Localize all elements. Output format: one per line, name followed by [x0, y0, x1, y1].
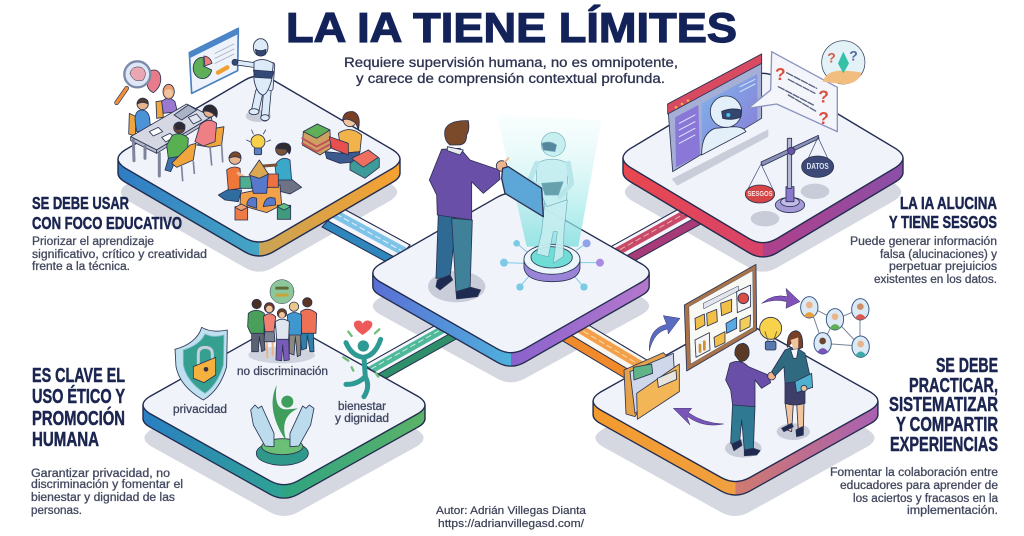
icon: speech bubble with question marks: ? [818, 87, 829, 107]
subtitle [344, 55, 678, 86]
children building blocks [218, 143, 302, 220]
icon: equality badge [270, 280, 294, 304]
man and woman shaking hands [725, 331, 813, 458]
text block: educational focus: SE DEBE USAR [32, 193, 129, 213]
text block: educational focus: significativo, crítico y creatividad [32, 249, 207, 261]
text block: hallucinations and bias: falsa (alucinaciones) y [880, 249, 997, 261]
icon: knowledge board [684, 264, 757, 371]
icon: presentation screen [189, 28, 238, 93]
labels on the ethics platform [173, 366, 389, 425]
icon: arrows between steps [649, 288, 800, 425]
icon: balance scale [745, 135, 834, 226]
icon: tablet [502, 167, 543, 217]
icon: people network [801, 297, 869, 357]
labels on the ethics platform: privacidad [173, 404, 227, 416]
bridge: practice to centre [553, 317, 655, 383]
illustration: classroom scene [117, 28, 379, 220]
panel: practice platform [593, 320, 878, 495]
text block: educational focus: Priorizar el aprendizaje [32, 236, 154, 248]
labels on the ethics platform: y dignidad [335, 413, 389, 425]
man seen from behind [428, 121, 508, 302]
icon: mirage thought bubble: ? [827, 50, 836, 66]
illustration: AI hallucinations and bias [668, 41, 865, 226]
hologram cone [497, 115, 602, 247]
text block: ethical use: Garantizar privacidad, no [31, 468, 170, 480]
bridge: education to centre [322, 207, 410, 265]
text block: practice and share: SE DEBE [936, 355, 998, 377]
platform shadows [121, 112, 901, 516]
text block: ethical use: personas. [31, 505, 82, 517]
icon: balance scale: SESGOS [747, 189, 773, 198]
icon: robot teacher [232, 39, 274, 122]
text block: ethical use: HUMANA [32, 429, 99, 451]
icon: light bulb [760, 317, 782, 350]
panel: educational focus platform [118, 76, 400, 256]
icon: mirage thought bubble [822, 41, 865, 84]
panel: ethics platform [143, 325, 425, 498]
text block: educational focus: CON FOCO EDUCATIVO [32, 213, 182, 233]
illustration: ethics icons [175, 280, 381, 465]
icon: privacy shield [175, 327, 227, 400]
icon: balance scale: DATOS [807, 162, 829, 171]
illustration: practice and share [624, 264, 869, 458]
author credit: https://adrianvillegasd.com/ [438, 518, 585, 530]
text block: practice and share [830, 355, 999, 517]
text block: educational focus [32, 193, 207, 273]
text block: ethical use: ES CLAVE EL [32, 365, 125, 387]
title: LA IA TIENE LÍMITES [286, 4, 737, 51]
icon: speech bubble with question marks: ? [775, 64, 786, 84]
subtitle: Requiere supervisión humana, no es omnipotente, [344, 55, 678, 70]
text block: ethical use: USO ÉTICO Y [32, 385, 125, 408]
diverse people group [248, 298, 317, 363]
subtitle: y carece de comprensión contextual profunda. [356, 71, 665, 86]
text block: ethical use: PROMOCIÓN [32, 406, 125, 430]
text block: practice and share: educadores para aprender de [840, 480, 998, 492]
bridge: ethics to centre [365, 320, 465, 379]
text block: hallucinations and bias [850, 193, 997, 286]
text block: hallucinations and bias: Puede generar información [850, 236, 997, 248]
network nodes around the pedestal [500, 239, 604, 291]
author credit: Autor: Adrián Villegas Dianta [436, 505, 587, 517]
text block: practice and share: los aciertos y fracasos en la [853, 493, 999, 505]
bridge: hallucination to centre [605, 200, 717, 265]
woman reading with stacks of books [302, 112, 379, 178]
labels on the ethics platform: no discriminación [237, 366, 328, 378]
panel: hallucination platform [623, 73, 903, 257]
text block: educational focus: frente a la técnica. [32, 261, 130, 273]
text block: ethical use [31, 365, 183, 517]
icon: magnifier with brain [117, 61, 161, 103]
icon: caring hands [251, 385, 314, 465]
panel: central platform [373, 193, 649, 366]
icon: holographic robot [530, 132, 572, 263]
illustration: human with AI hologram [428, 115, 604, 302]
icon: speech bubble with question marks [748, 52, 837, 132]
icon: screen with robot face [668, 54, 762, 172]
text block: practice and share: Fomentar la colaboración entre [830, 467, 998, 479]
icon: folder with documents [624, 353, 679, 419]
icon: mirage thought bubble: ? [849, 48, 858, 64]
text block: hallucinations and bias: perpetuar prejuicios [889, 261, 997, 273]
text block: practice and share: implementación. [907, 505, 998, 517]
labels on the ethics platform: bienestar [338, 401, 386, 413]
text block: hallucinations and bias: existentes en los datos. [874, 274, 997, 286]
author credit [436, 505, 587, 530]
icon: light bulb [247, 130, 271, 155]
text block: ethical use: bienestar y dignidad de las [31, 492, 175, 504]
floor shadow under screen [672, 129, 768, 186]
text block: ethical use: discriminación y fomentar el [31, 479, 183, 491]
icon: speech bubble with question marks: ? [818, 108, 829, 128]
text block: hallucinations and bias: LA IA ALUCINA [900, 193, 997, 213]
people around the study table [129, 84, 224, 181]
pedestal [524, 244, 580, 282]
icon: wellbeing figure with heart [343, 321, 381, 397]
